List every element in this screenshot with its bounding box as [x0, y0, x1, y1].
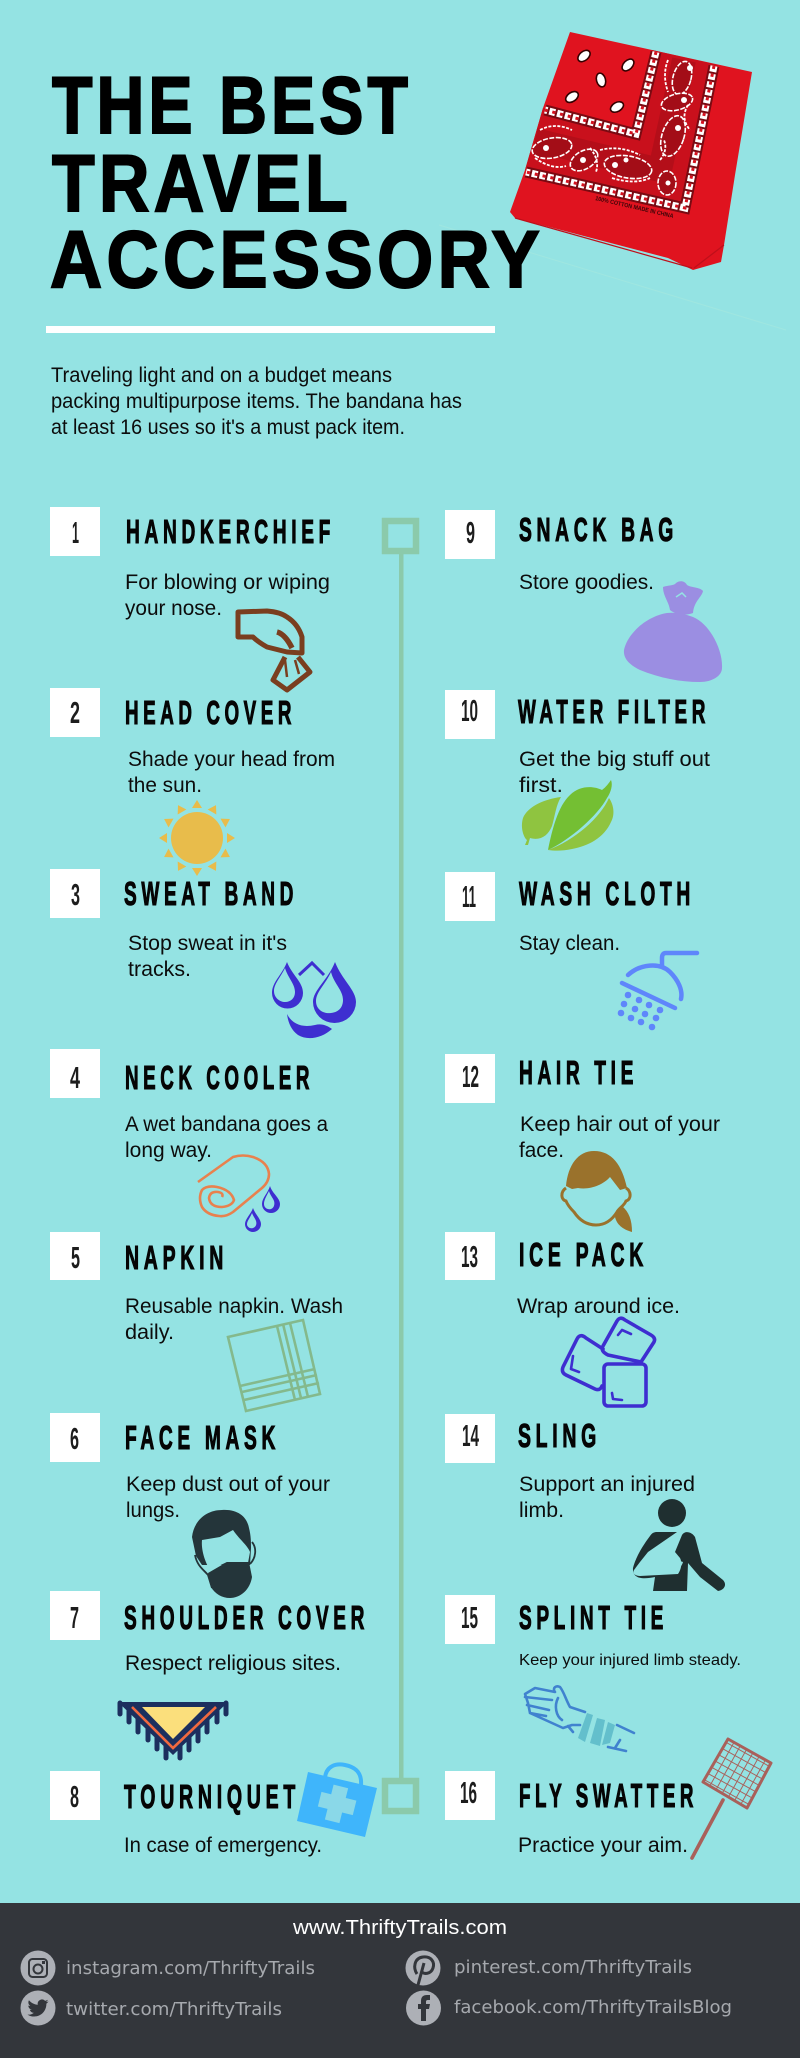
- description: Keep dust out of your: [126, 1473, 330, 1496]
- icon: shower: [618, 953, 697, 1030]
- number 10: 10: [461, 693, 478, 728]
- description: tracks.: [128, 958, 191, 981]
- item 2: head cover: [50, 688, 335, 876]
- heading: ICE PACK: [519, 1236, 648, 1273]
- item 11: wash cloth: [445, 872, 697, 1030]
- heading: HANDKERCHIEF: [126, 513, 335, 550]
- description: [519, 1113, 720, 1162]
- heading: HEAD COVER: [125, 694, 296, 731]
- description: Support an injured: [519, 1473, 695, 1496]
- description: In case of emergency.: [124, 1834, 322, 1857]
- number 1: [50, 507, 100, 556]
- icon: head with ponytail: [562, 1151, 632, 1232]
- item 13: ice pack: [445, 1232, 680, 1406]
- item 5: napkin: [50, 1232, 343, 1411]
- heading: SPLINT TIE: [519, 1599, 668, 1636]
- icon: fly swatter: [692, 1739, 771, 1858]
- title: TRAVEL: [52, 139, 352, 229]
- description: A wet bandana goes a: [125, 1113, 328, 1136]
- description: Practice your aim.: [518, 1834, 688, 1857]
- title: THE BEST: [52, 61, 412, 151]
- icon: rolled towel with drops: [198, 1156, 280, 1232]
- intro text: at least 16 uses so it's a must pack item.: [51, 416, 405, 439]
- number 7: 7: [70, 1600, 79, 1635]
- description: Stop sweat in it's: [128, 932, 287, 955]
- footer: [0, 1903, 800, 2058]
- description: long way.: [125, 1139, 212, 1162]
- description: Shade your head from: [128, 748, 335, 771]
- intro text: Traveling light and on a budget means: [51, 364, 392, 387]
- description: face.: [519, 1139, 564, 1162]
- description: [519, 748, 710, 797]
- number 6: [50, 1413, 100, 1462]
- icon: handkerchief: [238, 611, 310, 690]
- number 2: 2: [70, 695, 80, 730]
- number 9: [445, 510, 495, 559]
- description: your nose.: [125, 597, 222, 620]
- heading: SWEAT BAND: [124, 875, 298, 912]
- number 4: 4: [70, 1060, 80, 1095]
- number 10: [445, 690, 495, 739]
- description: Keep your injured limb steady.: [519, 1652, 741, 1669]
- description: [125, 1295, 343, 1344]
- number 12: 12: [462, 1059, 479, 1094]
- title: [50, 61, 544, 305]
- item 6: face mask: [50, 1413, 330, 1598]
- description: first.: [519, 774, 563, 797]
- heading: SNACK BAG: [519, 511, 678, 548]
- number 3: [50, 869, 100, 918]
- number 16: 16: [460, 1775, 477, 1810]
- item 14: sling: [445, 1414, 725, 1591]
- number 7: [50, 1591, 100, 1640]
- description: Store goodies.: [519, 571, 654, 594]
- divider bar: [46, 326, 495, 333]
- image: red bandana: [510, 32, 752, 270]
- heading: SLING: [518, 1417, 601, 1454]
- pinterest link: [406, 1950, 692, 1986]
- title: ACCESSORY: [50, 215, 544, 305]
- description: Reusable napkin. Wash: [125, 1295, 343, 1318]
- intro text: packing multipurpose items. The bandana has: [51, 390, 462, 413]
- icon: folded napkin: [228, 1320, 320, 1411]
- number 14: 14: [462, 1418, 479, 1453]
- icon: masked man: [192, 1510, 255, 1598]
- number 6: 6: [70, 1421, 79, 1456]
- number 8: 8: [70, 1779, 79, 1814]
- icon: sweat drops: [272, 962, 356, 1038]
- number 11: 11: [462, 879, 476, 914]
- description: [128, 748, 335, 797]
- number 12: [445, 1054, 495, 1103]
- twitter link: [20, 1990, 282, 2026]
- number 8: [50, 1771, 100, 1820]
- description: Get the big stuff out: [519, 748, 710, 771]
- item 9: snack bag: [445, 510, 722, 682]
- item 7: shoulder cover: [50, 1591, 369, 1758]
- website: www.ThriftyTrails.com: [292, 1917, 507, 1939]
- number 1: 1: [72, 515, 79, 550]
- description: the sun.: [128, 774, 202, 797]
- description: Wrap around ice.: [517, 1295, 680, 1318]
- description: [125, 1113, 328, 1162]
- number 15: 15: [461, 1600, 478, 1635]
- number 11: [445, 872, 495, 921]
- icon: person with arm sling: [633, 1499, 725, 1591]
- item 1: handkerchief: [50, 507, 335, 690]
- item 15: splint tie: [445, 1595, 741, 1751]
- item 10: water filter: [445, 690, 710, 851]
- item 12: hair tie: [445, 1054, 720, 1232]
- instagram link: [20, 1950, 315, 1986]
- instagram link: instagram.com/ThriftyTrails: [66, 1958, 315, 1979]
- icon: triangular shawl: [118, 1702, 228, 1758]
- description: For blowing or wiping: [125, 571, 330, 594]
- intro text: [51, 364, 462, 439]
- heading: HAIR TIE: [519, 1054, 638, 1091]
- description: daily.: [125, 1321, 174, 1344]
- item 4: neck cooler: [50, 1049, 328, 1232]
- description: [126, 1473, 330, 1522]
- number 13: 13: [461, 1239, 478, 1274]
- icon: sun: [159, 800, 235, 876]
- twitter link: twitter.com/ThriftyTrails: [66, 1999, 282, 2020]
- number 15: [445, 1595, 495, 1644]
- icon: purple bag: [624, 581, 722, 682]
- timeline: [385, 521, 416, 1811]
- description: Respect religious sites.: [125, 1652, 341, 1675]
- item 8: tourniquet: [50, 1764, 377, 1857]
- icon: ice cubes: [562, 1318, 655, 1406]
- number 16: [445, 1771, 495, 1820]
- description: [519, 1473, 695, 1522]
- heading: NAPKIN: [125, 1239, 228, 1276]
- number 5: 5: [71, 1240, 80, 1275]
- number 3: 3: [71, 877, 80, 912]
- description: lungs.: [126, 1499, 180, 1522]
- icon: first aid kit: [297, 1764, 377, 1837]
- number 9: 9: [466, 515, 475, 550]
- description: [125, 571, 330, 620]
- heading: FACE MASK: [125, 1419, 280, 1456]
- number 13: [445, 1232, 495, 1280]
- image: red bandana: 100% COTTON MADE IN CHINA: [595, 196, 674, 220]
- description: [128, 932, 287, 981]
- description: limb.: [519, 1499, 564, 1522]
- number 4: [50, 1049, 100, 1098]
- item 16: fly swatter: [445, 1739, 771, 1858]
- number 2: [50, 688, 100, 737]
- heading: SHOULDER COVER: [124, 1599, 369, 1636]
- facebook link: [406, 1990, 732, 2026]
- description: Stay clean.: [519, 932, 620, 955]
- heading: NECK COOLER: [125, 1059, 314, 1096]
- item 3: sweat band: [50, 869, 356, 1038]
- heading: TOURNIQUET: [124, 1778, 300, 1815]
- facebook link: facebook.com/ThriftyTrailsBlog: [454, 1997, 732, 2018]
- number 14: [445, 1414, 495, 1463]
- pinterest link: pinterest.com/ThriftyTrails: [454, 1957, 692, 1978]
- description: Keep hair out of your: [520, 1113, 720, 1136]
- icon: splinted arm: [525, 1686, 634, 1751]
- number 5: [50, 1232, 100, 1280]
- icon: leaves: [522, 780, 613, 851]
